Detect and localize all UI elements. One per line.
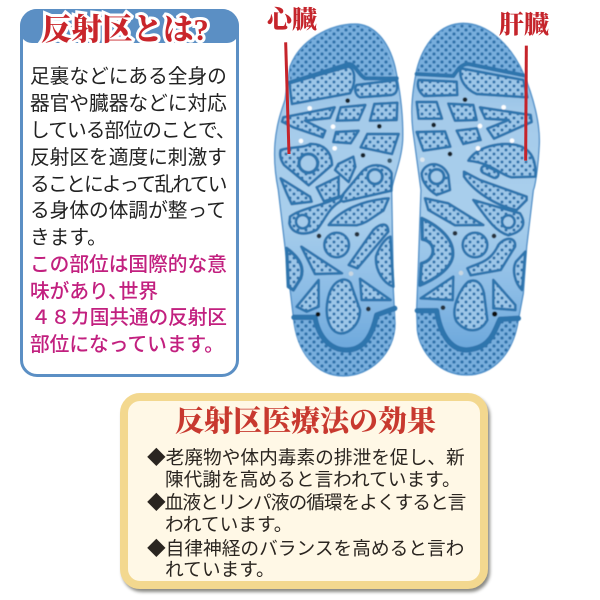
heel band bbox=[294, 308, 395, 350]
header band bbox=[20, 9, 239, 43]
cell with circle bbox=[422, 164, 450, 195]
bullet list: ◆自律神経のバランスを高めると言わ bbox=[147, 538, 464, 559]
panel frame bbox=[20, 9, 239, 377]
toe band bbox=[417, 64, 523, 76]
text block: explanation: きます。 bbox=[30, 227, 107, 249]
toe area bbox=[417, 25, 523, 74]
bullet list: ◆血液とリンパ液の循環をよくすると言 bbox=[147, 492, 465, 513]
heel area bbox=[418, 311, 518, 374]
toe area bbox=[290, 25, 394, 82]
heading: 反射区とは?: 反射区とは? bbox=[41, 13, 209, 47]
heel band bbox=[417, 311, 518, 350]
text block: explanation: る身体の体調が整って bbox=[30, 200, 226, 222]
arch cell with circle bbox=[280, 144, 332, 185]
right pins bbox=[420, 97, 514, 317]
right insole bbox=[412, 23, 539, 375]
label: liver: 肝臓 bbox=[499, 12, 549, 39]
forefoot cells bbox=[370, 103, 397, 121]
heel area bbox=[294, 309, 395, 375]
text block: explanation: 反射区を適度に刺激す bbox=[30, 147, 227, 169]
pointer line: liver bbox=[521, 46, 531, 161]
text block: explanation: 足裏などにある全身の bbox=[30, 66, 227, 88]
forefoot cells bbox=[417, 102, 442, 119]
ball cells bbox=[460, 68, 527, 97]
left pins bbox=[299, 98, 392, 317]
label: heart: 心臓 bbox=[267, 7, 317, 34]
bullet list bbox=[147, 447, 466, 580]
panel: what are reflex zones bbox=[20, 9, 239, 377]
bullet list: われています。 bbox=[165, 514, 292, 535]
large lateral cell bbox=[468, 144, 535, 177]
text block: explanation: ることによって乱れてい bbox=[30, 174, 226, 196]
text block: highlighted note bbox=[30, 254, 227, 356]
midfoot cells bbox=[425, 198, 483, 225]
ball cell bbox=[289, 67, 354, 104]
text block: explanation: している部位のことで、 bbox=[30, 120, 235, 142]
text block: highlighted note: 部位になっています。 bbox=[30, 334, 224, 356]
text block: highlighted note: この部位は国際的な意 bbox=[30, 254, 227, 276]
bullet list: れています。 bbox=[165, 559, 275, 580]
text block: explanation bbox=[30, 66, 235, 249]
text block: highlighted note: ４８カ国共通の反射区 bbox=[31, 307, 227, 329]
midfoot cells bbox=[289, 195, 343, 233]
panel background bbox=[120, 393, 488, 589]
bullet list: 陳代謝を高めると言われています。 bbox=[165, 469, 461, 490]
bullet list: ◆老廃物や体内毒素の排泄を促し、新 bbox=[147, 447, 465, 468]
pointer line: heart bbox=[286, 42, 289, 154]
right sole outline bbox=[412, 23, 539, 375]
text block: explanation: 器官や臓器などに対応 bbox=[30, 93, 227, 115]
heading: 反射区医療法の効果: 反射区医療法の効果 bbox=[175, 406, 436, 438]
toe band bbox=[289, 64, 397, 83]
panel: effects of reflexology bbox=[120, 393, 492, 594]
left sole outline bbox=[275, 24, 403, 376]
text block: highlighted note: 味があり、世界 bbox=[30, 281, 158, 303]
left insole bbox=[275, 24, 403, 376]
